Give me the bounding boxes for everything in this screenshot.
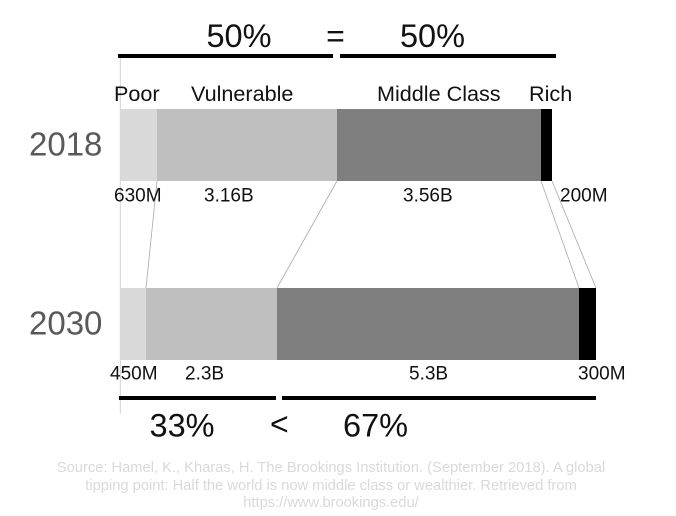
2030 values: 300M <box>578 364 626 384</box>
2030 values <box>110 364 626 384</box>
class headings: Rich <box>529 81 572 106</box>
bottom comparison: 33% < 67% <box>119 396 596 444</box>
class headings: Middle Class <box>377 81 501 106</box>
2018 values: 200M <box>560 186 608 206</box>
2018 values: 3.56B <box>403 186 453 206</box>
top comparison: 50% = 50%: 50% <box>206 18 272 54</box>
class headings: Vulnerable <box>191 81 293 106</box>
2030 values: 2.3B <box>185 364 224 384</box>
2030 values: 5.3B <box>409 364 448 384</box>
year label 2030: 2030 <box>29 304 102 342</box>
class headings: Poor <box>114 81 160 106</box>
2018 values: 630M <box>114 186 162 206</box>
2018 values: 3.16B <box>204 186 254 206</box>
top comparison: 50% = 50%: = <box>326 18 345 54</box>
2018 values <box>114 186 608 206</box>
top comparison: 50% = 50% <box>118 18 556 58</box>
year label 2018: 2018 <box>29 126 102 162</box>
source note: https://www.brookings.edu/ <box>243 495 420 511</box>
bar 2030 <box>120 288 596 360</box>
source note: tipping point: Half the world is now middle class or wealthier. Retrieved from <box>85 478 577 494</box>
bar 2018 <box>120 109 552 181</box>
source note <box>57 460 605 511</box>
bottom comparison: 33% < 67%: 67% <box>343 408 408 444</box>
2030 values: 450M <box>110 364 158 384</box>
source note: Source: Hamel, K., Kharas, H. The Brookings Institution. (September 2018). A global <box>57 460 605 476</box>
class headings <box>114 81 572 106</box>
top comparison: 50% = 50%: 50% <box>400 18 465 54</box>
bottom comparison: 33% < 67%: 33% <box>150 408 215 444</box>
connector lines between 2018 and 2030 bars <box>146 181 596 288</box>
bottom comparison: 33% < 67%: < <box>270 406 289 442</box>
